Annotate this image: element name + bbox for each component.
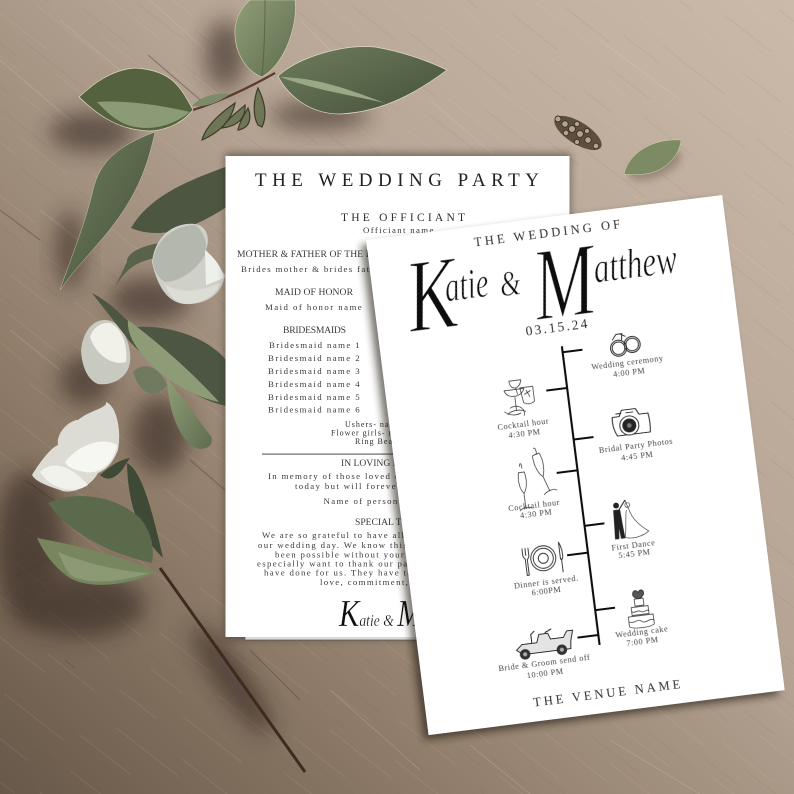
special thanks: especially want to thank our parents for all they bbox=[257, 558, 491, 568]
couple names: K bbox=[398, 234, 467, 355]
flower: top white bud bbox=[152, 224, 225, 304]
event: dinner bbox=[509, 540, 580, 600]
special thanks: love, commitment, and family. bbox=[320, 577, 467, 587]
leaves: lower branch bbox=[37, 463, 163, 585]
event: cocktail hour toast bbox=[501, 446, 562, 522]
bridesmaids: Bridesmaid name 5 bbox=[268, 392, 361, 402]
divider bbox=[262, 454, 532, 455]
right leaf highlight bbox=[280, 77, 385, 103]
bridesmaids bbox=[268, 325, 361, 414]
icon: rings bbox=[609, 332, 641, 357]
leaf: long pointed bbox=[60, 132, 155, 290]
in loving memory: Name of person bbox=[324, 496, 399, 506]
event: wedding ceremony: Wedding ceremony bbox=[591, 354, 664, 372]
right large leaf bbox=[278, 47, 447, 114]
stem bbox=[190, 73, 275, 111]
bridesmaids: Bridesmaid name 6 bbox=[268, 404, 361, 414]
event: wedding cake bbox=[610, 587, 670, 649]
icon: champagne flutes bbox=[513, 446, 559, 511]
couple names: atie bbox=[442, 260, 491, 311]
maid of honor bbox=[265, 287, 363, 312]
leaf: small dark bbox=[114, 243, 160, 289]
special thanks: our wedding day. We know this would not have bbox=[258, 540, 485, 550]
special thanks: SPECIAL THANKS bbox=[355, 517, 435, 528]
maid of honor: Maid of honor name bbox=[265, 302, 363, 312]
officiant bbox=[341, 212, 465, 235]
couple names: M bbox=[525, 222, 606, 343]
event: dinner: Dinner is served. bbox=[513, 574, 579, 591]
icon: plate and cutlery bbox=[522, 542, 565, 577]
icon: cocktail glasses bbox=[501, 378, 536, 418]
bridesmaids: Bridesmaid name 4 bbox=[268, 379, 361, 389]
heading: THE WEDDING PARTY bbox=[255, 170, 539, 191]
card sheet bbox=[226, 156, 570, 637]
event: wedding ceremony bbox=[588, 329, 666, 382]
event: bridal party photos bbox=[594, 404, 675, 465]
parents of the bride: Brides mother & brides father bbox=[241, 264, 386, 274]
in loving memory: today but will forever be in our hearts bbox=[295, 481, 481, 491]
event: cocktail hour: 4:30 PM bbox=[508, 427, 541, 440]
branch: lower flower stem bbox=[160, 568, 305, 772]
card sheet bbox=[366, 195, 785, 735]
left leaf bbox=[79, 68, 193, 131]
event: dinner: 6:00PM bbox=[531, 585, 562, 597]
officiant: THE OFFICIANT bbox=[341, 212, 465, 224]
signature: Katie & Matthew bbox=[338, 593, 460, 635]
officiant: Officiant name bbox=[363, 225, 435, 235]
ushers and attendants: Ushers- names bbox=[345, 420, 405, 429]
event: cocktail hour toast: Cocktail hour bbox=[508, 498, 560, 513]
event: cocktail hour toast: 4:30 PM bbox=[520, 507, 553, 520]
couple names: & bbox=[497, 262, 523, 304]
leaf: large middle with light fold bbox=[92, 293, 226, 406]
bridesmaids: Bridesmaid name 1 bbox=[269, 340, 361, 350]
special thanks: We are so grateful to have all of you here for bbox=[262, 530, 482, 540]
front card shadow bbox=[361, 200, 778, 740]
eyebrow heading: THE WEDDING OF bbox=[473, 217, 621, 249]
venue: THE VENUE NAME bbox=[532, 677, 681, 710]
event: send off: Bride & Groom send off bbox=[498, 653, 591, 673]
top leaf bbox=[235, 0, 295, 77]
buds bbox=[202, 88, 265, 140]
event: bridal party photos: Bridal Party Photos bbox=[598, 437, 673, 455]
top leaf vein bbox=[262, 0, 265, 76]
event: send off: 10:00 PM bbox=[526, 667, 564, 680]
event: wedding ceremony: 4:00 PM bbox=[613, 366, 646, 379]
bridesmaids: Bridesmaid name 2 bbox=[268, 353, 361, 363]
flower: middle bud bbox=[81, 320, 130, 384]
leaf: underside small bbox=[133, 366, 167, 394]
ushers and attendants bbox=[331, 420, 433, 446]
flower: open white bloom bbox=[32, 402, 130, 492]
leaf: lower pale bbox=[167, 378, 212, 449]
icon: dancing couple bbox=[610, 498, 649, 540]
event: send off bbox=[494, 624, 592, 684]
event: wedding cake: 7:00 PM bbox=[626, 635, 659, 648]
event: first dance bbox=[606, 497, 657, 561]
timeline spine and branches bbox=[541, 344, 619, 648]
special thanks: have done for us. They have taught us about bbox=[264, 568, 478, 578]
event: cocktail hour: Cocktail hour bbox=[497, 417, 550, 432]
icon: tiered cake bbox=[625, 589, 655, 629]
parents of the bride bbox=[237, 249, 395, 274]
in loving memory: IN LOVING MEMORY bbox=[341, 458, 435, 469]
special thanks bbox=[257, 517, 491, 587]
in loving memory: In memory of those loved ones who can't be here bbox=[268, 471, 504, 481]
pine cone bbox=[549, 109, 607, 157]
bridesmaids: Bridesmaid name 3 bbox=[268, 366, 361, 376]
icon: vintage car bbox=[514, 626, 575, 661]
lower stacked sheet bbox=[245, 630, 585, 640]
ushers and attendants: Flower girls- names bbox=[331, 428, 414, 438]
back card: the wedding party bbox=[225, 153, 585, 640]
left leaf light half bbox=[97, 102, 190, 128]
event: bridal party photos: 4:45 PM bbox=[621, 450, 654, 463]
ushers and attendants: Ring Bearer- name bbox=[355, 437, 433, 446]
event: first dance: First Dance bbox=[611, 538, 656, 553]
event: wedding cake: Wedding cake bbox=[615, 624, 669, 640]
small leaf bbox=[192, 94, 230, 106]
couple names bbox=[398, 207, 685, 359]
leaf: behind back card bbox=[131, 166, 228, 233]
couple names: atthew bbox=[591, 236, 680, 293]
bridesmaids: BRIDESMAIDS bbox=[283, 325, 346, 336]
small loose leaf bbox=[624, 140, 685, 187]
soft leaf and flower shadows bbox=[0, 20, 370, 743]
icon: camera bbox=[611, 407, 651, 437]
front card: wedding timeline bbox=[366, 195, 785, 735]
branch: top sprig bbox=[79, 0, 447, 140]
maid of honor: MAID OF HONOR bbox=[275, 287, 354, 298]
in loving memory bbox=[268, 458, 504, 506]
card shadow bbox=[225, 153, 571, 639]
event: cocktail hour bbox=[492, 377, 551, 441]
parents of the bride: MOTHER & FATHER OF THE BRIDE bbox=[237, 249, 395, 260]
event: first dance: 5:45 PM bbox=[618, 547, 651, 560]
special thanks: been possible without your support. We bbox=[275, 550, 466, 560]
date: 03.15.24 bbox=[525, 316, 588, 339]
